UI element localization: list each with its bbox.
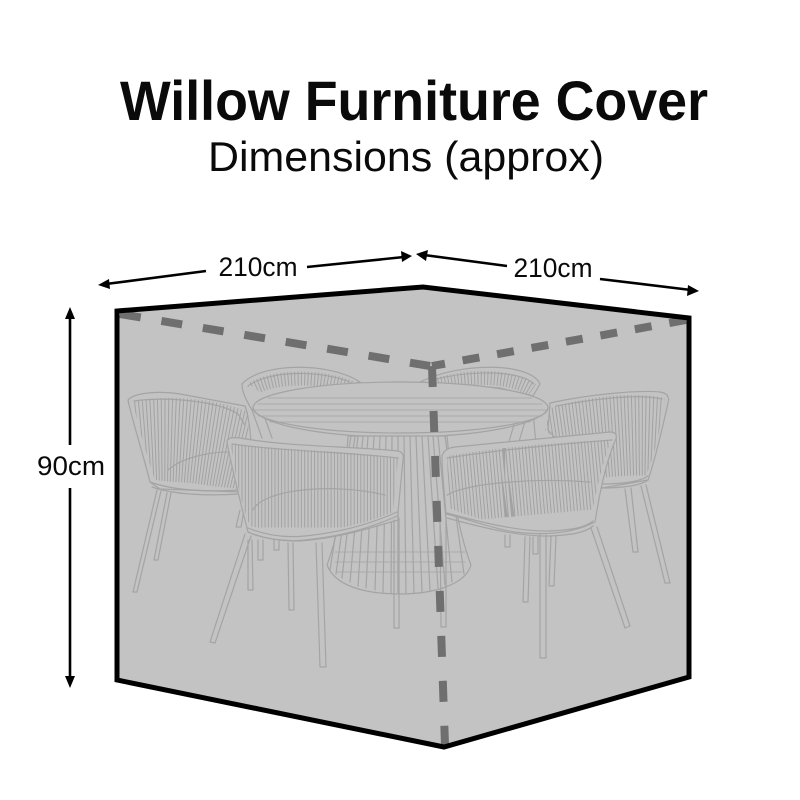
table pedestal xyxy=(327,436,471,594)
dashed seams xyxy=(120,314,686,745)
dimension: left width: 210cm xyxy=(218,252,298,282)
chair front right xyxy=(440,432,630,658)
side chair left xyxy=(125,392,255,592)
dimension: height: 90cm xyxy=(37,451,105,481)
side chair right xyxy=(540,391,672,583)
back chair right xyxy=(420,367,540,445)
dimension: left width xyxy=(98,251,412,289)
subtitle: Dimensions (approx) xyxy=(208,133,604,180)
table top xyxy=(253,382,548,437)
chair front left xyxy=(210,438,405,667)
back chair left xyxy=(242,367,360,438)
dimension: right width: 210cm xyxy=(514,253,592,283)
cover body xyxy=(117,287,689,747)
title: Willow Furniture Cover xyxy=(120,69,708,132)
dimension: right width xyxy=(416,250,699,296)
cover outline xyxy=(117,287,689,747)
dimension: height xyxy=(37,307,105,688)
